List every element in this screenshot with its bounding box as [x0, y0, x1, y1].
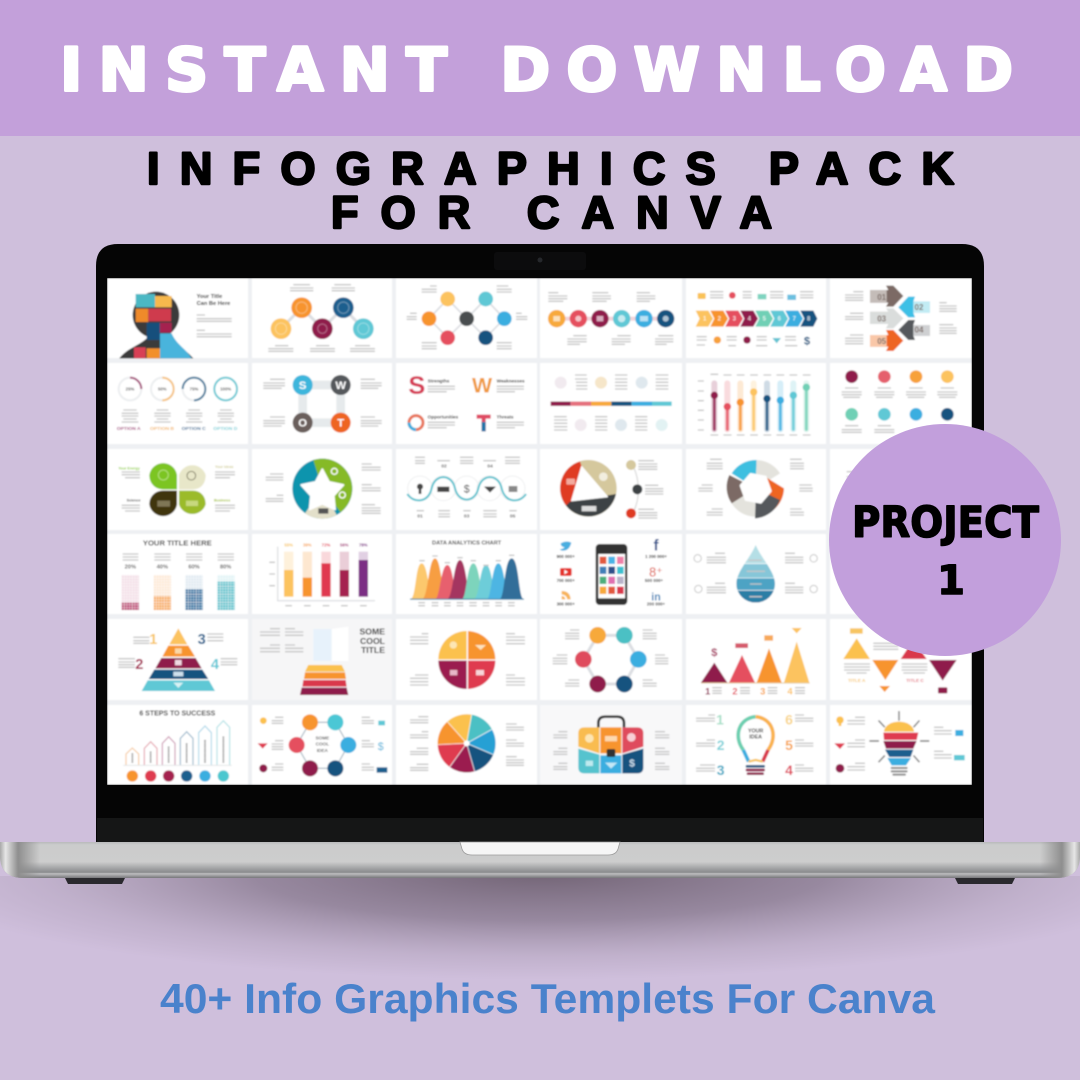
thumbnail: triangle circle [560, 460, 663, 518]
thumbnail: percent rings: OPTION C [182, 426, 206, 432]
footer tagline: 40+ Info Graphics Templets For Canva [160, 975, 936, 1022]
thumbnail: triangle chart: $ [711, 647, 718, 659]
thumbnail: pyramid: 2 [135, 657, 143, 673]
thumbnail: percent rings: OPTION A [117, 426, 141, 432]
thumbnail: chevron band: 2 [718, 317, 722, 323]
thumbnail: phone social stats: 8⁺ [649, 566, 663, 580]
thumbnail: stairs to door [260, 626, 386, 695]
thumbnail: infinity circles [407, 286, 527, 349]
thumbnail: wave timeline: $ [464, 484, 470, 496]
thumbnail: percent grids: YOUR TITLE HERE [143, 538, 212, 547]
thumbnail: four petals: Your Ideas [215, 465, 233, 469]
thumbnail: wave timeline: 01 [417, 513, 423, 519]
upper right thumbnails [548, 286, 957, 518]
thumbnail: SWOT circles: S [299, 380, 307, 392]
thumbnail: hidden by badge [847, 472, 860, 479]
laptop shadow [0, 876, 1080, 986]
header band [0, 0, 1080, 136]
thumbnail: percent rings: 50% [158, 387, 167, 392]
thumbnail: head puzzle [119, 292, 232, 358]
subtitle: infographics pack for canva: FOR CANVA [331, 187, 772, 238]
thumbnail: briefcase: $ [629, 759, 635, 770]
thumbnail: interlocked chevrons [845, 286, 957, 351]
camera notch [494, 252, 586, 270]
thumbnail: water drop layers [694, 543, 817, 604]
thumbnail: your idea bulb: IDEA [749, 735, 762, 741]
thumbnail: four petals: Your Energy [118, 466, 141, 470]
thumbnail: your idea bulb: 5 [785, 737, 793, 753]
thumbnail: four petals: Science [127, 499, 140, 503]
thumbnail: phone social stats: 1 200 000+ [645, 554, 667, 559]
thumbnail: your idea bulb: 3 [717, 762, 725, 778]
thumbnail: wave timeline: 04 [487, 463, 493, 469]
thumbnail: chevron band [696, 292, 817, 348]
thumbnail: SWOT letters [408, 372, 525, 431]
thumbnail: interlocked chevrons: 03 [877, 315, 887, 324]
thumbnail: head puzzle: Your Title [197, 294, 222, 300]
thumbnail: four petals [118, 463, 235, 516]
thumbnail: your idea bulb: YOUR [748, 729, 764, 735]
thumbnail: phone social stats: 300 000+ [557, 601, 575, 606]
thumbnail: your idea bulb: 6 [785, 711, 793, 727]
thumbnail: wave timeline: 05 [510, 513, 516, 519]
thumbnail: hexagon cycle: COOL [316, 742, 329, 747]
thumbnail: hexagon cycle: $ [378, 741, 384, 753]
thumbnail: alternating triangles: TITLE A [848, 678, 866, 683]
thumbnail: your idea bulb: 4 [785, 762, 793, 778]
thumbnail: SWOT circles: O [298, 418, 307, 430]
thumbnail: ribbon timeline [551, 375, 672, 431]
thumbnail: SWOT circles: W [335, 380, 346, 392]
thumbnail: stacked bar chart: 55% [284, 542, 293, 547]
thumbnail: seven-part pie [410, 714, 524, 772]
thumbnail: interlocked chevrons: 04 [915, 326, 924, 335]
thumbnail: chevron band: 4 [748, 317, 752, 323]
thumbnail: quarter pie [410, 631, 525, 689]
thumbnail: option circles [842, 370, 957, 432]
thumbnail: stacked bar chart: 78% [359, 542, 368, 547]
thumbnail: triangle chart: 4 [787, 687, 793, 697]
thumbnail: stairs to door: SOME [359, 626, 385, 636]
thumbnail: percent rings: OPTION D [213, 426, 238, 432]
thumbnail: circle row [548, 293, 674, 344]
thumbnail: your idea bulb: 1 [716, 711, 724, 727]
thumbnail: phone social stats: 500 000+ [645, 578, 664, 583]
badge: project 1: 1 [937, 558, 965, 604]
thumbnail: chevron band: 6 [778, 317, 782, 323]
thumbnail: percent grids: 80% [220, 565, 231, 571]
thumbnail: wave timeline [407, 457, 526, 519]
thumbnail: pyramid [118, 628, 237, 691]
thumbnail: percent rings: 75% [190, 387, 198, 392]
thumbnail: bell curve chart: DATA ANALYTICS CHART [432, 541, 502, 547]
thumbnail: stacked bar chart: 56% [340, 542, 349, 547]
thumbnail: percent grids [122, 538, 235, 610]
upper left thumbnails [117, 285, 527, 519]
lower bezel [97, 818, 983, 842]
thumbnail: triangle chart: 2 [732, 687, 738, 697]
thumbnail: six steps [123, 710, 232, 782]
thumbnail: SWOT letters: S [408, 372, 425, 400]
thumbnail: triangle chart: 3 [760, 687, 765, 697]
thumbnail: chevron band: 7 [793, 317, 797, 323]
laptop base [0, 842, 1080, 884]
thumbnail: chevron band: 8 [807, 317, 811, 323]
thumbnail: pyramid: 3 [198, 632, 206, 648]
thumbnail: bell curve chart [410, 541, 524, 606]
heading: instant download: INSTANT DOWNLOAD [60, 36, 1013, 106]
thumbnail: SWOT letters: Threats [497, 415, 514, 420]
laptop feet [65, 878, 1015, 884]
thumbnail: stacked bar chart [269, 542, 375, 606]
thumbnail: SWOT circles [263, 375, 382, 433]
subtitle: infographics pack for canva [147, 143, 954, 238]
thumbnail: hexagon cycle: SOME [315, 735, 329, 740]
thumbnail: percent rings [117, 378, 238, 432]
laptop [0, 244, 1080, 884]
thumbnail: chevron band: 3 [733, 317, 737, 323]
thumbnail: chevron band: $ [804, 336, 811, 348]
thumbnail: SWOT letters: Weaknesses [497, 378, 525, 383]
thumbnail: SWOT letters: W [472, 374, 493, 398]
thumbnail: connected circles [268, 285, 375, 351]
thumbnail: rainbow bulb [834, 712, 965, 775]
thumbnail: wave timeline: 02 [441, 463, 447, 469]
thumbnail: triangle chart [701, 628, 810, 697]
thumbnail: hexagon cycle: IDEA [317, 748, 329, 753]
thumbnail backgrounds [107, 278, 972, 785]
thumbnail: percent grids: 20% [125, 565, 136, 571]
thumbnail: wave timeline: 03 [464, 513, 470, 519]
thumbnail: pyramid: 4 [211, 657, 220, 673]
thumbnail: SWOT circles: T [337, 418, 344, 430]
thumbnail: your idea bulb [696, 711, 813, 778]
thumbnail: alternating triangles [843, 628, 957, 693]
thumbnail: your idea bulb: 2 [717, 737, 725, 753]
thumbnail: circle ring [553, 627, 668, 692]
thumbnail: slider chart [698, 374, 810, 435]
thumbnail: percent rings: 25% [126, 387, 134, 392]
lower left thumbnails [118, 538, 525, 782]
thumbnail: head puzzle: Can Be Here [197, 301, 230, 307]
thumbnail: stairs to door: COOL [360, 636, 386, 646]
thumbnail: interlocked chevrons: 02 [915, 303, 924, 312]
thumbnail: pyramid: 1 [149, 632, 157, 648]
thumbnail: SWOT letters: Strengths [428, 379, 450, 384]
thumbnail: phone social stats: in [651, 592, 661, 604]
hinge notch [460, 842, 620, 855]
thumbnail: interlocked chevrons: 05 [877, 337, 887, 346]
thumbnail: percent rings: 100% [220, 387, 231, 392]
thumbnail: four petals: Business [214, 499, 230, 503]
thumbnail: interlocked chevrons: 01 [877, 293, 887, 302]
thumbnail: chevron band: 5 [763, 317, 767, 323]
thumbnail: alternating triangles: TITLE C [906, 678, 924, 683]
screen with template thumbnails [107, 278, 972, 785]
thumbnail: phone social stats: 200 000+ [647, 601, 666, 606]
thumbnail: star ring [266, 459, 381, 519]
thumbnail: triangle chart: 1 [705, 687, 710, 697]
thumbnail: percent grids: 60% [188, 565, 200, 571]
thumbnail: aperture ring [698, 459, 813, 518]
laptop lid [96, 244, 984, 842]
thumbnail: phone social stats: 700 000+ [557, 578, 575, 583]
thumbnail: briefcase [553, 717, 669, 773]
thumbnail: SWOT letters: Opportunities [428, 415, 459, 420]
thumbnail: stacked bar chart: 39% [303, 542, 312, 547]
badge: project 1 [829, 424, 1061, 656]
thumbnail: phone social stats [557, 538, 667, 606]
thumbnail: six steps: 6 STEPS TO SUCCESS [139, 710, 216, 717]
thumbnail: chevron band: 1 [703, 317, 707, 323]
badge: project 1: PROJECT [852, 498, 1040, 548]
thumbnail: percent rings: OPTION B [150, 426, 174, 432]
thumbnail: phone social stats: 900 000+ [557, 554, 575, 559]
thumbnail: percent grids: 40% [157, 565, 168, 571]
thumbnail: phone social stats: f [653, 538, 659, 555]
thumbnail: stacked bar chart: 72% [322, 542, 330, 547]
thumbnail: stairs to door: TITLE [361, 645, 385, 655]
thumbnail: hexagon cycle [258, 714, 387, 776]
lower right thumbnails [553, 538, 965, 778]
subtitle: infographics pack for canva: INFOGRAPHICS PACK [147, 143, 954, 194]
